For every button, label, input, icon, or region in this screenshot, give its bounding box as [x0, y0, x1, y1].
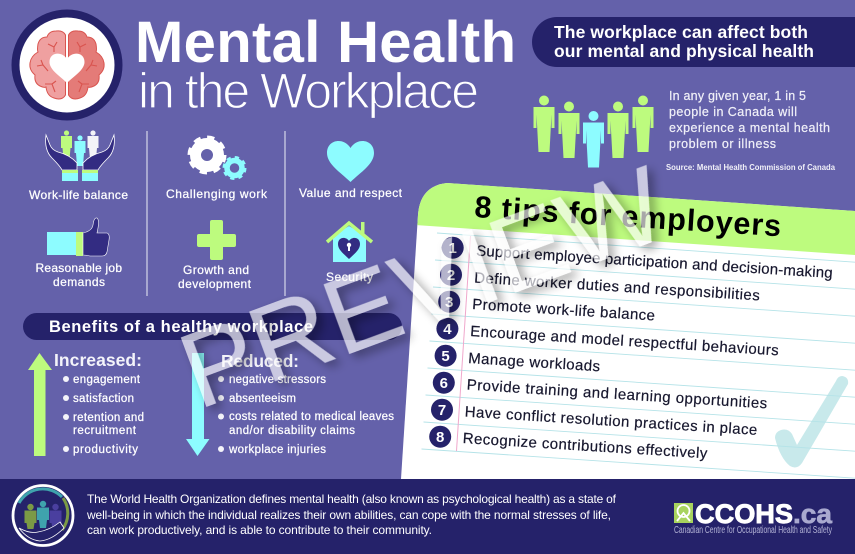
- card header band: [417, 183, 855, 255]
- icon: house with heart: [327, 222, 372, 262]
- list: increased: satisfaction: [73, 393, 134, 405]
- label: work-life balance: Work-life balance: [29, 188, 128, 202]
- panel: 8 tips card: [400, 175, 855, 479]
- arrow: reduced: [186, 353, 210, 456]
- label: reasonable job demands: [36, 261, 122, 289]
- banner: workplace affects health: our mental and physical health: [554, 41, 814, 61]
- statistic text: problem or illness: [669, 137, 776, 151]
- list: reduced: costs related to medical leaves: [229, 411, 394, 423]
- list: reduced: workplace injuries: [228, 444, 326, 456]
- banner: workplace affects health: [532, 17, 855, 67]
- footer definition text: The World Health Organization defines mental health (also known as psychological health) as a state of: [87, 492, 617, 506]
- number badges: 8: [436, 429, 444, 446]
- panel: benefits heading: Benefits of a healthy workplace: [49, 318, 313, 336]
- label: value and respect: Value and respect: [299, 186, 403, 200]
- tips list: Provide training and learning opportunities: [466, 377, 768, 412]
- tips list: Support employee participation and decision-making: [476, 243, 833, 282]
- arrow: increased: [28, 353, 52, 456]
- label: reasonable job demands: demands: [53, 275, 105, 289]
- list: reduced: Reduced:: [221, 351, 299, 371]
- title: Mental Health: [135, 10, 516, 75]
- list: increased: Increased:: [54, 350, 142, 370]
- statistic text: experience a mental health: [669, 121, 830, 135]
- list: increased: retention and: [73, 412, 144, 424]
- title: in the Workplace: [138, 63, 479, 119]
- list: reduced: [218, 351, 394, 456]
- number badges: 4: [443, 321, 452, 338]
- list: reduced: absenteeism: [229, 393, 296, 405]
- title: [135, 10, 516, 119]
- footer definition text: can work productively, and is able to contribute to their community.: [87, 523, 432, 537]
- list: increased: engagement: [73, 374, 141, 386]
- watermark: PREVIEW: PREVIEW: [164, 143, 681, 432]
- icon: heart: [327, 141, 374, 182]
- icon: hands holding people: [46, 130, 114, 181]
- tips list: Manage workloads: [468, 350, 601, 375]
- label: challenging work: Challenging work: [166, 187, 268, 201]
- list: increased: productivity: [73, 444, 138, 456]
- statistic text: people in Canada will: [669, 105, 797, 119]
- tips list: Define worker duties and responsibilities: [474, 270, 760, 304]
- source note: Source: Mental Health Commission of Canada: [666, 162, 835, 172]
- footer definition text: [86, 492, 617, 537]
- number badges: 2: [447, 267, 455, 284]
- label: growth and development: Growth and: [183, 263, 249, 277]
- icon: five people: [534, 96, 654, 168]
- list: increased: recruitment: [73, 425, 137, 437]
- icon: thumbs up: [47, 218, 109, 256]
- margin line: [456, 236, 470, 451]
- list: reduced: negative stressors: [229, 374, 326, 386]
- number badges: 3: [445, 294, 453, 311]
- label: growth and development: [178, 263, 252, 291]
- number badges: 5: [441, 348, 450, 365]
- icon: brain logo: [16, 14, 118, 116]
- logo: CCOHS: [674, 499, 833, 536]
- logo: CCOHS: CCOHS: [695, 499, 793, 529]
- icon: plus: [197, 220, 236, 260]
- tips list: Have conflict resolution practices in place: [464, 404, 758, 439]
- card heading: 8 tips for employers: [474, 190, 782, 243]
- footer definition text: well-being in which the individual realizes their own abilities, can cope with the normal stresses of life,: [86, 508, 611, 522]
- banner: workplace affects health: The workplace can affect both: [554, 22, 808, 42]
- tips list: Recognize contributions effectively: [462, 430, 708, 462]
- tips list: Encourage and model respectful behaviours: [470, 323, 779, 359]
- watermark check: [775, 376, 848, 467]
- footer band: [0, 479, 855, 554]
- icon: footer people logo: [13, 486, 73, 546]
- tips list: [462, 243, 833, 462]
- panel: benefits heading: [23, 313, 402, 340]
- logo: CCOHS: .ca: [793, 499, 833, 529]
- tips list: Promote work-life balance: [472, 296, 655, 324]
- statistic text: [669, 89, 830, 151]
- list: increased: [54, 350, 144, 456]
- list: reduced: and/or disability claims: [229, 425, 355, 437]
- number badges: 7: [438, 402, 446, 419]
- label: reasonable job demands: Reasonable job: [36, 261, 122, 275]
- statistic text: In any given year, 1 in 5: [669, 89, 806, 103]
- icon: gears: [190, 138, 245, 178]
- number badges: [429, 237, 464, 448]
- number badges: 1: [449, 240, 457, 257]
- label: security: Security: [326, 270, 373, 284]
- label: growth and development: development: [178, 277, 252, 291]
- number badges: 6: [440, 375, 448, 392]
